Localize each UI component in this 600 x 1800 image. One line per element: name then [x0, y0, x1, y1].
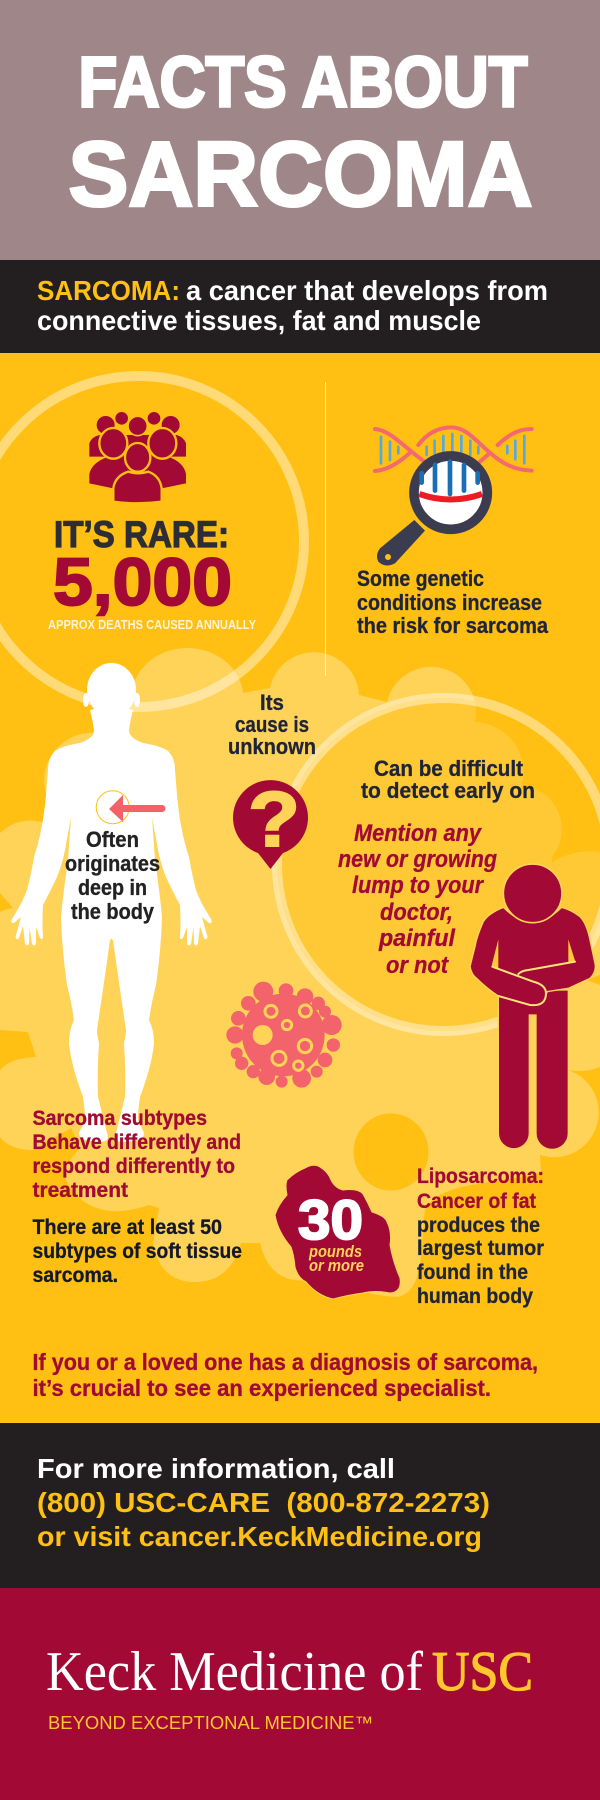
liposarcoma text: human body	[417, 1285, 533, 1308]
rare heading: IT’S RARE:	[54, 514, 229, 555]
subtypes count text: sarcoma.	[32, 1264, 118, 1287]
subtypes heading	[32, 1107, 241, 1202]
definition text line 1: a cancer that develops from	[186, 275, 548, 306]
unknown cause text: unknown	[228, 734, 316, 759]
big number 5,000: 5,000	[53, 545, 232, 620]
tumor blob with 30 pounds	[275, 1165, 400, 1299]
liposarcoma text: produces the	[417, 1214, 540, 1237]
body text: the body	[71, 899, 155, 924]
genetics text	[357, 566, 549, 638]
logo USC: USC	[432, 1641, 533, 1703]
icon: group of people	[89, 412, 186, 503]
liposarcoma text: found in the	[417, 1261, 528, 1284]
genetics text: the risk for sarcoma	[357, 613, 549, 638]
specialist callout: it’s crucial to see an experienced specialist.	[32, 1375, 491, 1401]
tumor blob with 30 pounds: or more	[309, 1256, 364, 1275]
unknown cause text: cause is	[235, 712, 309, 737]
subtypes heading: treatment	[32, 1179, 128, 1202]
panel: logo footer	[0, 1588, 600, 1800]
subtypes heading: Behave differently and	[32, 1131, 241, 1154]
icon: question mark bubble: ?	[248, 775, 300, 863]
title line 2: SARCOMA	[68, 124, 532, 226]
marker circle with arrow	[96, 791, 166, 824]
unknown cause text	[228, 690, 316, 759]
body text: Often	[86, 827, 139, 852]
logo wordmark: Keck Medicine of	[46, 1641, 423, 1703]
advice text: lump to your	[352, 872, 484, 899]
body silhouette	[11, 663, 212, 1142]
liposarcoma text: Liposarcoma:	[417, 1165, 544, 1188]
icon: cancer cell	[226, 982, 342, 1088]
panel: contact band	[0, 1423, 600, 1588]
title line 1: FACTS ABOUT	[78, 44, 528, 122]
subtypes count text	[32, 1216, 242, 1287]
icon: person holding stomach	[470, 864, 595, 1149]
detection text	[361, 756, 535, 803]
definition text line 2: connective tissues, fat and muscle	[37, 305, 481, 336]
genetics text: conditions increase	[357, 590, 542, 615]
contact line 1: For more information, call	[37, 1453, 395, 1484]
advice text	[338, 820, 497, 979]
ring around rare statistic	[0, 376, 304, 707]
body text: originates	[65, 851, 160, 876]
detection text: to detect early on	[361, 778, 535, 803]
liposarcoma text: largest tumor	[417, 1237, 544, 1260]
advice text: Mention any	[354, 820, 482, 847]
body text: deep in	[78, 875, 147, 900]
panel: definition band	[0, 260, 600, 353]
unknown cause text: Its	[260, 690, 284, 715]
panel: yellow main background	[0, 353, 600, 1423]
liposarcoma text: Cancer of fat	[417, 1190, 536, 1213]
background cloud shape	[0, 648, 600, 1297]
advice text: painful	[378, 925, 456, 952]
pounds caption: pounds	[308, 1242, 362, 1261]
phone line: (800) USC-CARE (800-872-2273)	[37, 1487, 490, 1518]
subtypes count text: subtypes of soft tissue	[32, 1240, 242, 1263]
genetics text: Some genetic	[357, 566, 484, 591]
icon: DNA under magnifying glass	[375, 427, 532, 565]
tagline: BEYOND EXCEPTIONAL MEDICINE™	[48, 1713, 373, 1733]
subtypes heading: Sarcoma subtypes	[32, 1107, 207, 1130]
body text	[65, 827, 160, 924]
icon: question mark bubble	[233, 775, 308, 869]
subtypes count text: There are at least 50	[32, 1216, 222, 1239]
deaths caption: APPROX DEATHS CAUSED ANNUALLY	[48, 617, 256, 632]
subtypes heading: respond differently to	[32, 1155, 235, 1178]
website line: or visit cancer.KeckMedicine.org	[37, 1521, 482, 1552]
advice text: or not	[386, 952, 449, 979]
definition term: SARCOMA:	[37, 275, 180, 306]
ring around detection note	[277, 698, 600, 1031]
panel: title header	[0, 0, 600, 260]
detection text: Can be difficult	[374, 756, 524, 781]
specialist callout: If you or a loved one has a diagnosis of sarcoma,	[32, 1349, 538, 1375]
advice text: doctor,	[380, 899, 453, 926]
number 30: 30	[298, 1188, 363, 1251]
liposarcoma text	[417, 1165, 544, 1308]
specialist callout	[32, 1349, 538, 1401]
advice text: new or growing	[338, 846, 497, 873]
